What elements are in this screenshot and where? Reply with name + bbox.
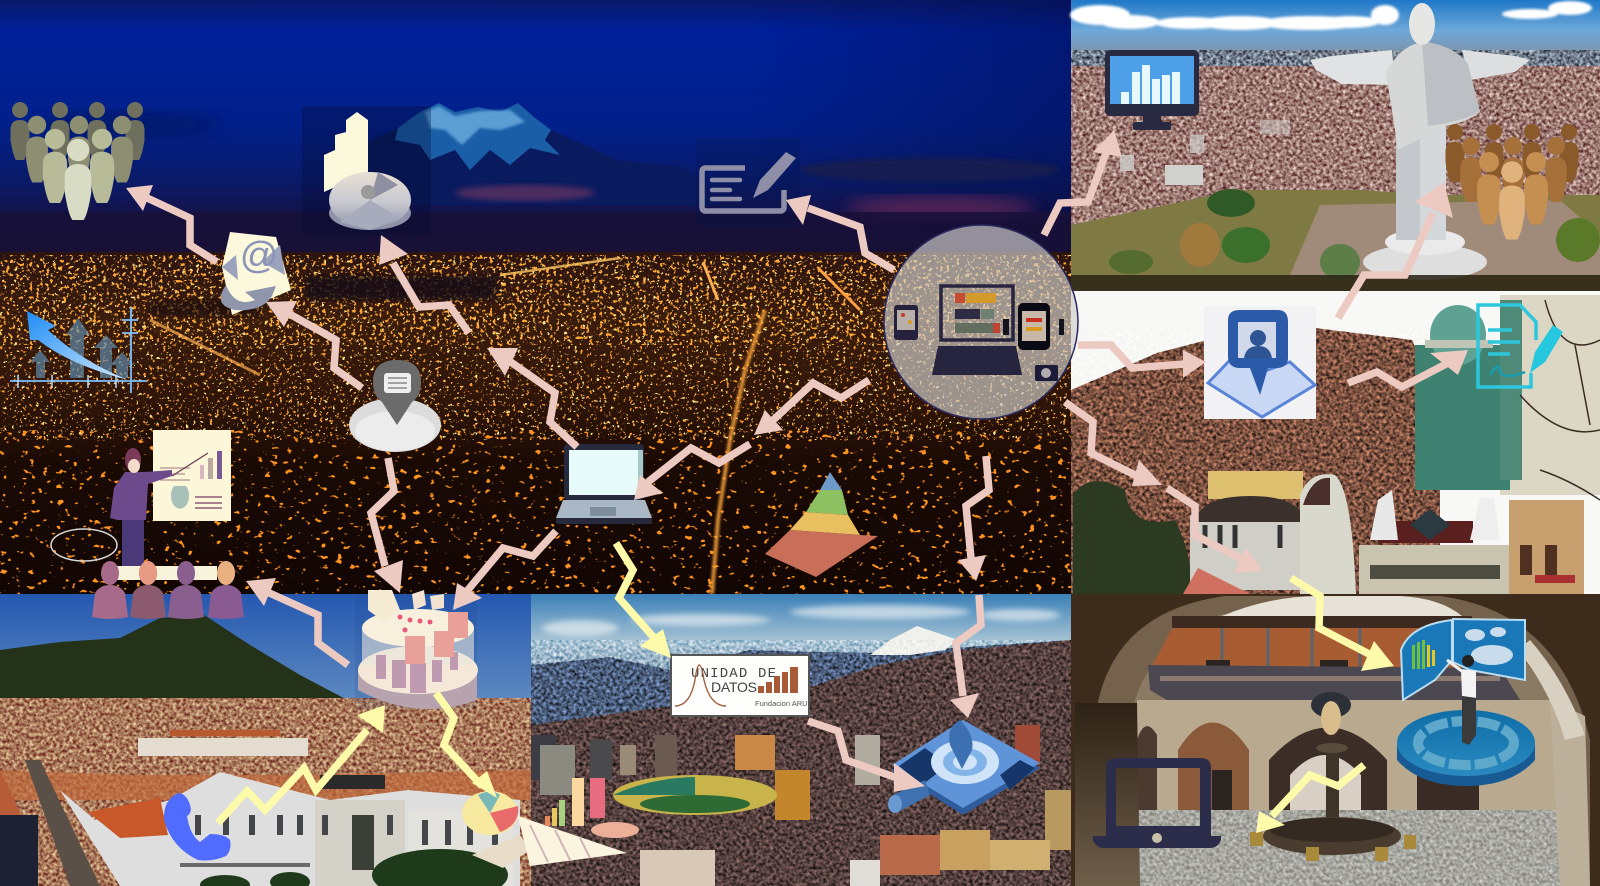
signature swirl	[51, 529, 117, 561]
white sky	[1071, 291, 1600, 594]
courtyard opening	[1130, 614, 1565, 886]
icon: dark outline laptop	[1093, 758, 1221, 848]
arrow: circle to centre	[754, 380, 869, 435]
icon: isometric data cake	[355, 590, 478, 709]
icon: location pin on disc	[349, 360, 441, 452]
icon: grey crowd	[10, 102, 144, 220]
arrow: circle to user map	[1078, 345, 1206, 378]
mask and fountain	[1250, 692, 1416, 861]
arrow: continuing to buildings	[1167, 488, 1263, 573]
colourful lower houses	[640, 830, 1050, 886]
audience	[92, 561, 244, 619]
box: Unidad de Datos logo: UNIDAD DE	[691, 666, 776, 682]
sky	[0, 594, 531, 724]
rooftops of the city	[0, 698, 531, 886]
green hill and plaza	[1071, 189, 1600, 291]
cobbled courtyard floor	[1137, 810, 1565, 886]
vibrating phone	[1003, 303, 1064, 350]
arrows: yellow connectors	[218, 543, 1394, 833]
bare tree branches	[1520, 300, 1600, 500]
arrow: pin to email	[266, 301, 362, 388]
city below	[1071, 50, 1600, 235]
arrow: circle to pen card	[786, 195, 894, 270]
arrow: down from night city	[958, 456, 989, 581]
panel: La Paz street buildings	[1071, 291, 1600, 594]
clouds	[1070, 1, 1592, 30]
white apartment towers	[1120, 120, 1290, 185]
arrow: laptop to cake	[453, 531, 556, 610]
arrow: Unidad de Datos to map	[808, 721, 925, 792]
icon: blue growth chart	[10, 307, 147, 393]
orange historic building	[1509, 500, 1584, 594]
arrow: circle down right	[1065, 402, 1162, 486]
sky with clouds	[531, 594, 1071, 674]
trees foreground	[200, 849, 508, 886]
city lights	[0, 252, 1071, 594]
Illimani snow peak and far mountains	[531, 626, 1071, 730]
dark stone corners	[1071, 594, 1600, 886]
panel: Casa de la Moneda courtyard	[1071, 594, 1600, 886]
green glass tower	[1415, 295, 1600, 495]
panel: Sucre city and hill	[0, 594, 531, 886]
presentation board	[153, 430, 231, 521]
night sky	[0, 0, 1071, 255]
icon: signature card and pen	[696, 138, 800, 227]
dense hillside houses	[531, 640, 1071, 886]
arrow: to light laptop	[634, 444, 750, 500]
arrow: phone to cake	[218, 705, 385, 823]
orange upper gallery	[1150, 616, 1490, 672]
arrow: circle to monitor	[1044, 130, 1122, 235]
dark translucent caption band	[1071, 275, 1600, 291]
laptop with dashboard	[932, 286, 1022, 375]
arrow: fountain to dark laptop	[1256, 765, 1364, 833]
icon: blue telephone	[164, 793, 230, 860]
white colonial buildings	[60, 772, 520, 886]
trees at left	[1073, 481, 1191, 594]
brown hillside	[1071, 328, 1440, 594]
stage bar	[117, 566, 217, 580]
arrow: to document	[1348, 350, 1468, 387]
curved screens	[1401, 620, 1452, 700]
arch ring	[1095, 596, 1590, 886]
Churuquella hill	[0, 615, 380, 720]
presenter	[110, 448, 172, 572]
panel: La Paz with stadium	[531, 594, 1071, 886]
lower stone arcade	[1137, 700, 1557, 812]
gallery railing	[1148, 665, 1520, 702]
left and right columns	[1075, 640, 1590, 886]
Cristo statue	[1310, 3, 1530, 280]
box: Unidad de Datos logo: Fundacion ARU	[755, 699, 808, 708]
stadium	[613, 775, 777, 815]
icon: brown crowd	[1446, 124, 1578, 240]
icon: laptop light screen	[556, 444, 652, 524]
arrows: pink network connectors	[126, 130, 1468, 792]
icon: bar chart monitor	[1105, 50, 1199, 130]
icon: map magnifier location	[888, 720, 1040, 815]
icon: user location on map	[1204, 306, 1316, 419]
central low building	[1359, 490, 1509, 594]
arrow: to cream chart	[379, 235, 469, 333]
arrow: laptop to center	[487, 348, 577, 447]
arrow: building to dashboard	[1291, 578, 1394, 671]
arrow: email to crowd	[126, 185, 217, 262]
man	[1447, 655, 1476, 745]
arrow: cake to audience	[246, 578, 348, 665]
icon: cream bars and pie	[302, 106, 431, 235]
arrow: cake to pie	[436, 693, 497, 798]
platform	[1397, 745, 1535, 786]
icon: devices circle	[884, 225, 1078, 419]
box: Unidad de Datos logo	[671, 655, 809, 716]
pink dusk clouds	[0, 111, 1071, 256]
icon: document and pen	[1478, 305, 1563, 387]
icon: pie chart, bars and papers	[462, 778, 639, 868]
icon: email with at sign: @	[240, 235, 278, 277]
icon: analyst with dashboard on platform	[1397, 619, 1535, 786]
camera	[1035, 365, 1058, 381]
yellow and white buildings	[1183, 471, 1356, 594]
panel: La Paz at night with Illimani	[0, 0, 1071, 594]
sky	[1071, 0, 1600, 55]
arrow: laptop to Unidad de Datos	[616, 543, 671, 658]
Illimani mountain	[340, 103, 720, 205]
small phone	[894, 305, 918, 340]
arrow: down to map magnifier	[950, 595, 981, 718]
white corrugated roof	[1222, 596, 1462, 616]
icon: email with at sign	[221, 232, 291, 315]
panel: Cochabamba Cristo de la Concordia	[1070, 0, 1600, 291]
arrow: to brown crowd	[1338, 182, 1453, 318]
arrow: pin to cake	[371, 458, 403, 593]
icon: presenter with audience	[51, 430, 244, 619]
icon: layered pyramid	[765, 472, 878, 577]
box: Unidad de Datos logo: DATOS	[711, 679, 757, 695]
downtown towers	[531, 725, 1071, 850]
